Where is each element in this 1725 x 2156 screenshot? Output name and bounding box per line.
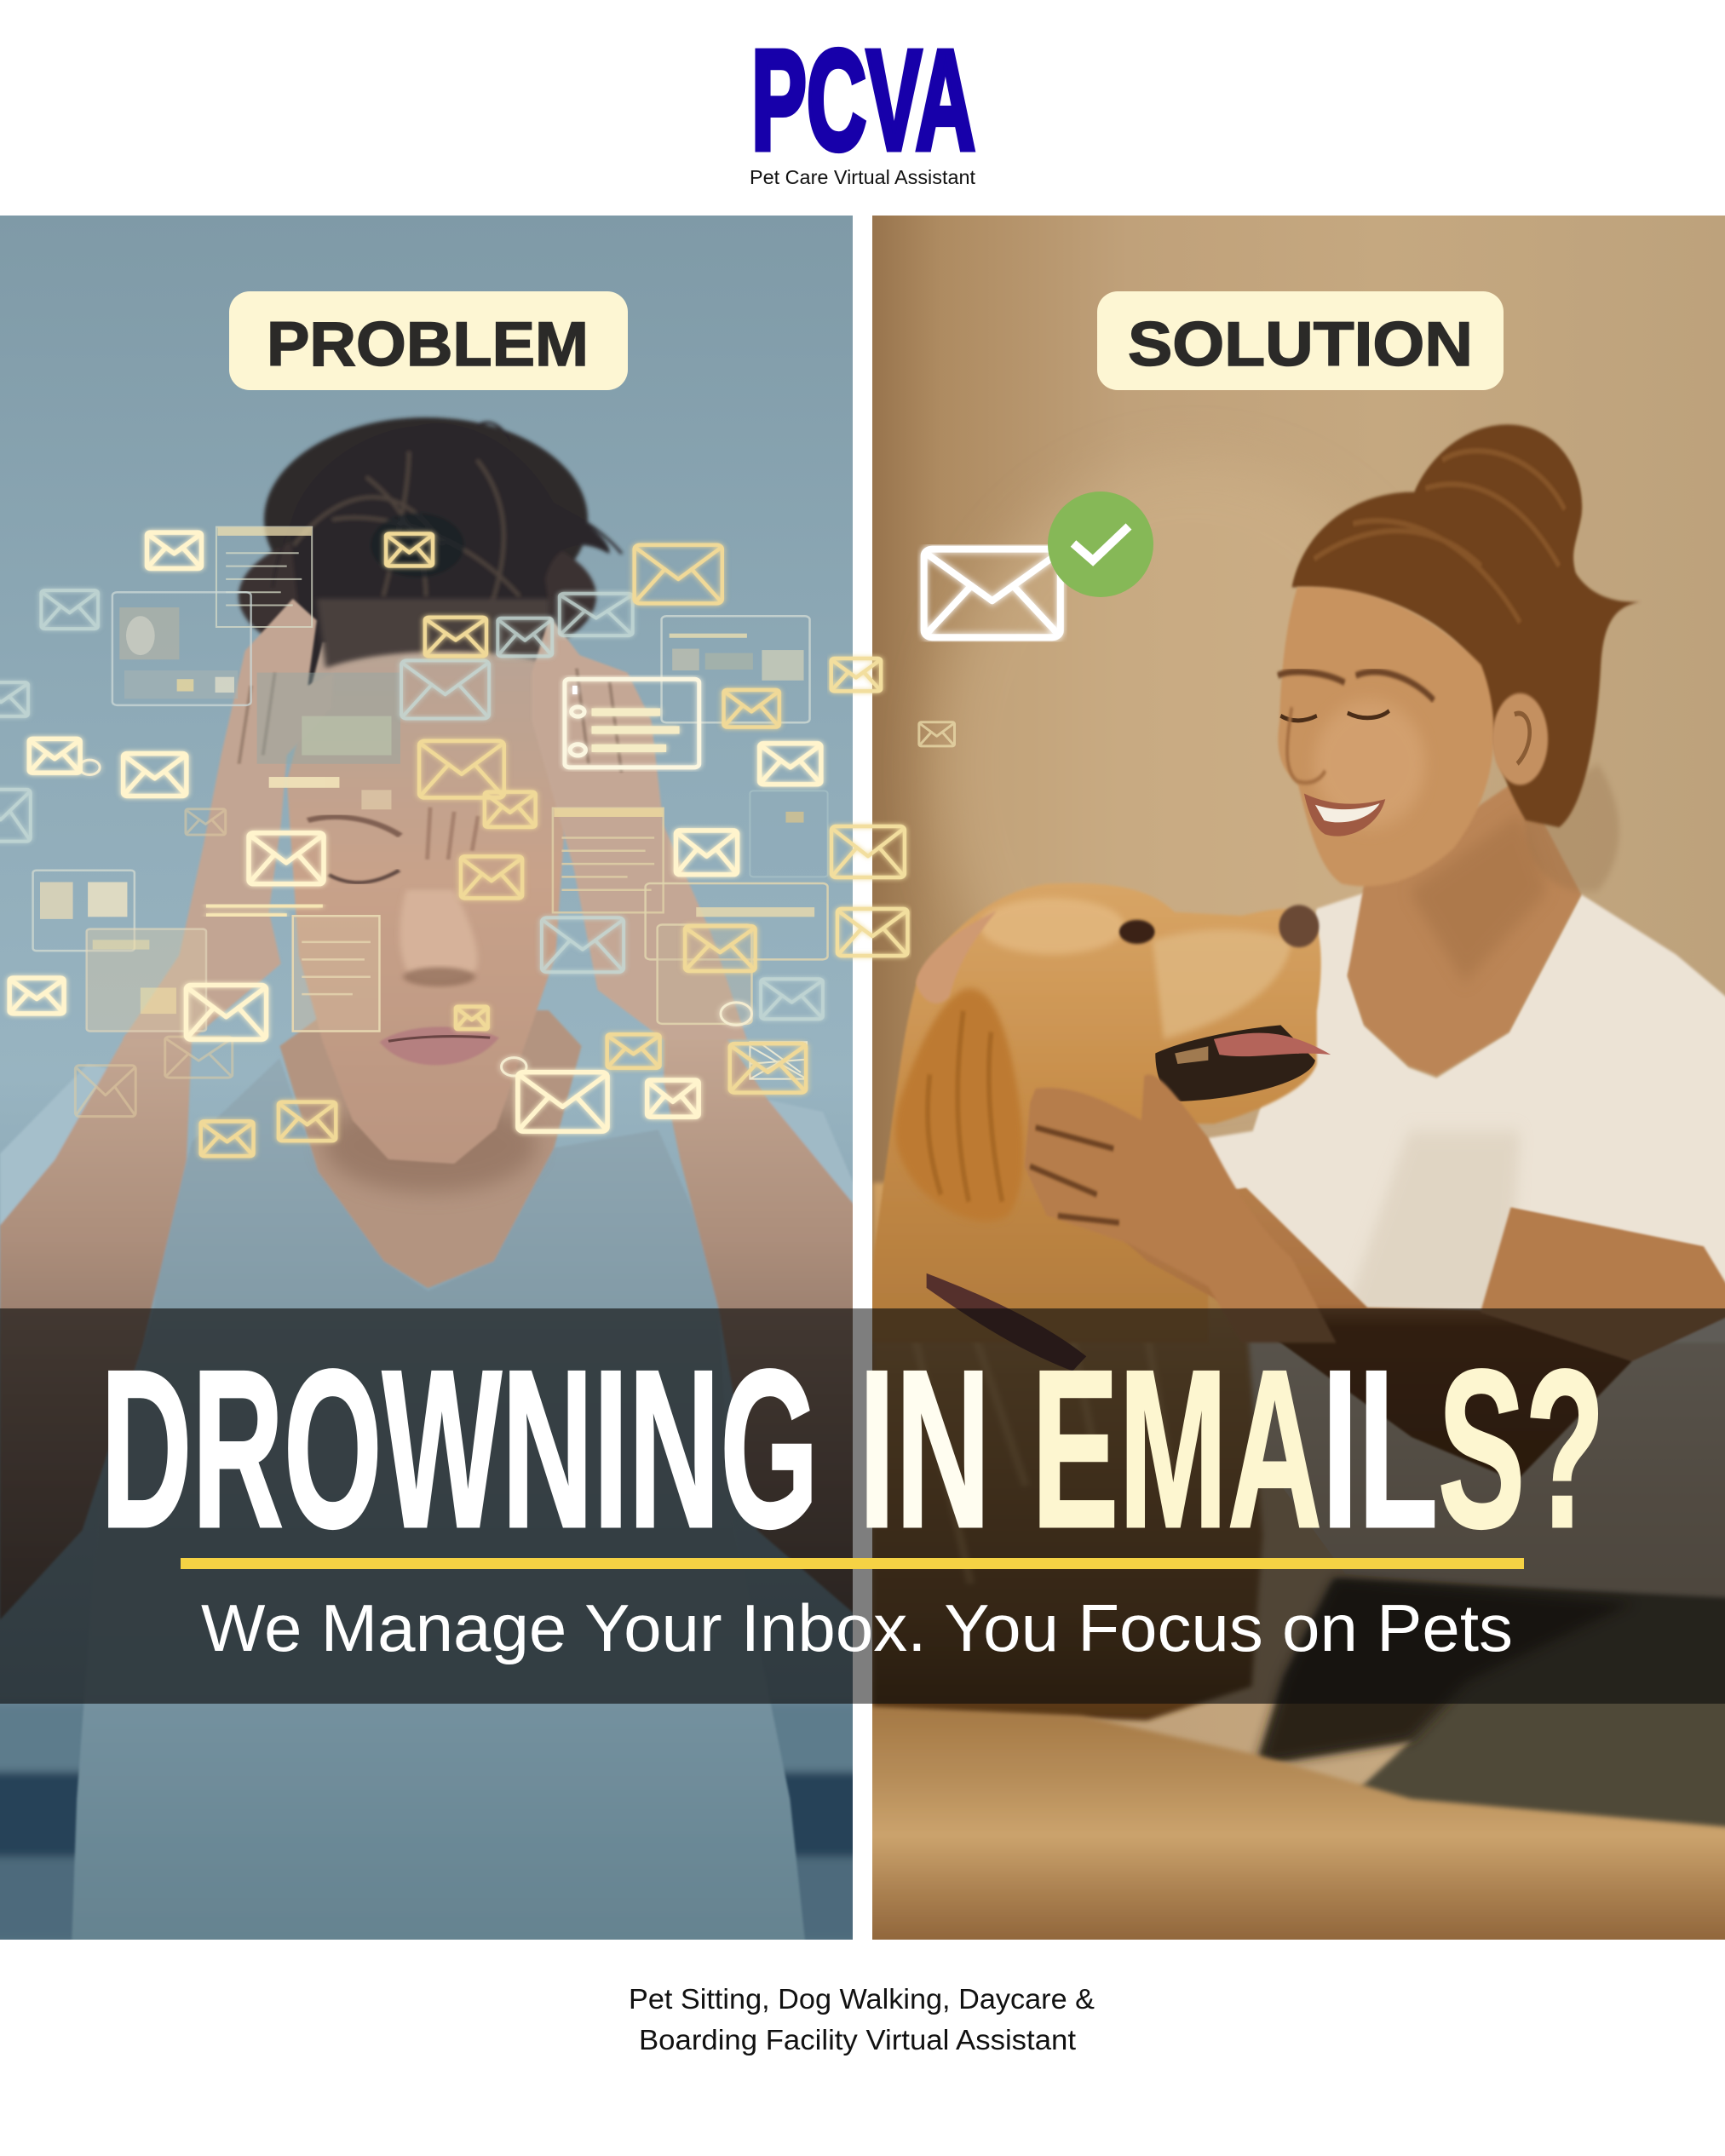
icon: envelope: [730, 1044, 806, 1093]
panel: solution: [860, 216, 1725, 1955]
figure: woman head: [1208, 424, 1725, 1342]
headline: DROWNING IN EMAILS?: IN: [859, 1323, 991, 1574]
window: bright message card: [565, 679, 699, 768]
icon: envelope: [831, 658, 881, 691]
eyebrows: [1278, 672, 1434, 700]
icon: envelope: [279, 1102, 336, 1141]
upper arm: [1481, 1207, 1725, 1361]
icon: envelope: [497, 618, 552, 656]
window: document on cheek: [293, 916, 379, 1032]
nose shading: [400, 890, 478, 981]
figure: stressed woman body: [0, 1010, 861, 1954]
window: message lines: [206, 906, 323, 916]
dog nose: [1279, 905, 1319, 947]
logo: PCVA wordmark: PCVA: [751, 21, 975, 180]
divider tone inside band: [853, 1308, 872, 1704]
lower torso and jeans: [1224, 1183, 1725, 1877]
figure: face: [287, 599, 567, 1164]
dog ear: [895, 989, 1023, 1222]
window: translucent panel lower left: [87, 929, 206, 1032]
envelopes: faint layer: [75, 809, 233, 1117]
icon: envelope: [685, 926, 756, 971]
figure: arm reaching dog: [916, 911, 1725, 1481]
foreground: blurred sofa: [860, 1706, 1725, 1955]
window: thumbnails left: [33, 871, 135, 951]
furrowed brow: [428, 808, 478, 860]
logo tagline: Pet Care Virtual Assistant: [750, 166, 976, 188]
icon: envelope: [401, 660, 489, 719]
dog head: [869, 883, 1321, 1342]
panel: problem: [0, 216, 869, 1954]
dark headline band: [0, 1308, 1725, 1704]
holographic windows: [0, 527, 828, 1156]
window: analytics left: [112, 592, 251, 705]
icon: green check badge: [1048, 492, 1153, 597]
icon: envelope: [761, 979, 823, 1019]
window: dashboard right: [662, 616, 810, 722]
icon: envelope: [760, 744, 821, 785]
icon: email approved: [924, 492, 1153, 637]
icon: envelope: [0, 682, 28, 716]
face: [1278, 587, 1494, 886]
figure: golden retriever: [869, 883, 1331, 1721]
icon: envelope: [837, 909, 907, 956]
icon: envelope: [676, 831, 738, 875]
icon: scribbled envelope cluster: [750, 1042, 807, 1079]
icon: envelope: [9, 978, 64, 1014]
window: text block forehead: [269, 777, 391, 809]
dog body lower: [872, 1183, 1262, 1721]
right sleeve: [740, 1100, 861, 1273]
icon: envelope: [41, 590, 98, 629]
smile: [1304, 793, 1385, 837]
icon: envelope: [75, 1066, 135, 1117]
icon: envelope: [723, 690, 779, 727]
right forearm: [664, 1034, 861, 1620]
envelopes: bright layer: [9, 532, 821, 1131]
subheadline: We Manage Your Inbox. You Focus on Pets: [201, 1590, 1513, 1665]
shirt upper: [1208, 889, 1725, 1342]
window: document centre right: [553, 808, 664, 912]
figure: right hand on temple: [532, 616, 747, 1040]
icon: envelope: [165, 1037, 233, 1078]
icon: envelope: [456, 1007, 488, 1029]
nose: [1287, 707, 1325, 783]
icon: envelope: [419, 741, 504, 797]
forearm: [1092, 1187, 1632, 1481]
figure: left hand on temple: [123, 599, 333, 1040]
loose hair at nape: [1525, 764, 1619, 892]
envelopes crossing the centre divider: [831, 658, 907, 956]
icon: envelope: [249, 833, 324, 884]
jeans: [1257, 1578, 1725, 1877]
icon: envelope: [542, 917, 624, 972]
envelopes: pale layer: [0, 590, 823, 1019]
ear: [1492, 693, 1548, 785]
icon: envelope: [518, 1072, 607, 1131]
footer text: Pet Sitting, Dog Walking, Daycare &: [629, 1983, 1095, 2015]
headline: DROWNING IN EMAILS?: EMAILS?: [1032, 1323, 1605, 1574]
shirt shading: [1342, 1131, 1520, 1322]
icon: envelope: [386, 534, 433, 566]
neck shadow under chin: [324, 1099, 537, 1193]
icon: envelope: [560, 594, 633, 635]
background: blurred lower wall: [0, 1704, 869, 1942]
shirt: [72, 1058, 807, 1954]
dog mouth: [1155, 1025, 1315, 1101]
icon: envelope: [831, 826, 905, 877]
left forearm: [0, 1034, 192, 1620]
hand on jaw: [1025, 1075, 1337, 1342]
dog eye: [1119, 920, 1155, 944]
icon: envelope: [647, 1080, 699, 1117]
label: SOLUTION: SOLUTION: [1128, 310, 1473, 379]
dog collar: [927, 1273, 1086, 1371]
envelopes: warm layer: [201, 534, 806, 1156]
left sleeve: [0, 1067, 106, 1225]
yellow divider: [181, 1558, 1524, 1569]
dog teeth: [1175, 1046, 1208, 1064]
dog tongue: [1214, 1033, 1331, 1056]
hand on dog head: [916, 911, 997, 1003]
icon: envelope: [147, 532, 201, 568]
icon: envelope: [186, 809, 226, 835]
label: PROBLEM: [229, 291, 628, 390]
window: small chart right: [750, 791, 828, 877]
mouth: [379, 1026, 499, 1065]
shirt lower: [1224, 1183, 1725, 1603]
icon: envelope: [461, 856, 522, 898]
dog forehead highlight: [980, 898, 1124, 954]
label: PROBLEM: PROBLEM: [267, 310, 589, 379]
window: forehead grey-green panel: [257, 673, 400, 764]
label: SOLUTION: [1097, 291, 1504, 390]
neck: [279, 1010, 582, 1288]
icon: small faded envelope: [919, 722, 955, 746]
headline: DROWNING IN EMAILS?: DROWNING: [101, 1323, 819, 1574]
forehead hair roots: [317, 599, 553, 668]
closed eye: [329, 871, 400, 883]
background glow behind dog: [937, 460, 1448, 1073]
hair: [1291, 424, 1642, 827]
window: document top: [216, 527, 312, 627]
icon: envelope: [0, 790, 31, 842]
icon: envelope: [425, 618, 486, 656]
left eyebrow: [308, 817, 400, 836]
icons: small badges: [79, 760, 751, 1076]
window: wide card lower right: [646, 883, 828, 1024]
icon: envelope: [201, 1121, 254, 1156]
footer text: [629, 1983, 1095, 2055]
icon: envelope: [124, 754, 187, 796]
closed eyes: [1280, 710, 1389, 721]
figure: hair bun: [239, 417, 622, 690]
icon: envelope: [29, 739, 80, 773]
neck: [1348, 778, 1581, 1076]
icon: envelope: [485, 792, 536, 827]
icon: envelope: [186, 985, 267, 1039]
footer text: Boarding Facility Virtual Assistant: [639, 2024, 1076, 2055]
dog muzzle highlight: [1153, 929, 1291, 1039]
icon: envelope: [635, 545, 722, 603]
icon: envelope: [607, 1034, 660, 1068]
